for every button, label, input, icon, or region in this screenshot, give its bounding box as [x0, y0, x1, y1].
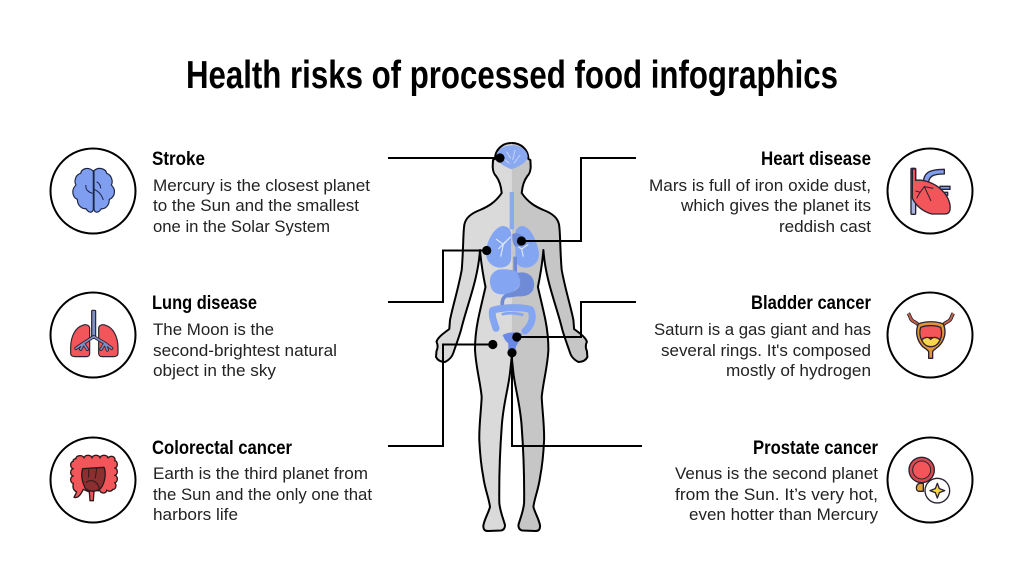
connector: bladder cancer	[512, 302, 636, 342]
heading: lung disease: Lung disease	[152, 292, 257, 314]
icon: brain	[50, 148, 136, 234]
intestines	[492, 308, 532, 331]
text: heart disease	[649, 177, 871, 236]
text: prostate cancer: Venus is the second planet	[675, 465, 878, 483]
text: heart disease: Mars is full of iron oxide dust,	[649, 177, 871, 195]
heading: prostate cancer: Prostate cancer	[753, 437, 878, 459]
text: lung disease: object in the sky	[153, 362, 277, 380]
heading: stroke: Stroke	[152, 148, 205, 170]
text: bladder cancer: several rings. It's composed	[661, 342, 871, 360]
duodenum	[502, 295, 512, 305]
text: colorectal cancer: harbors life	[153, 506, 238, 524]
connector: prostate cancer	[507, 348, 642, 446]
text: heart disease: which gives the planet its	[680, 197, 871, 215]
organs	[486, 145, 539, 351]
heading: colorectal cancer: Colorectal cancer	[152, 437, 292, 459]
icon: heart	[888, 148, 972, 234]
connector: colorectal cancer	[388, 340, 497, 446]
panel: bladder cancer	[654, 292, 972, 380]
panel: prostate cancer	[675, 437, 972, 524]
text: lung disease: second-brightest natural	[153, 342, 337, 360]
text: colorectal cancer: the Sun and the only one that	[153, 486, 372, 504]
icon: bladder	[888, 292, 972, 378]
body: right half	[512, 143, 587, 531]
text: lung disease: The Moon is the	[153, 321, 274, 339]
heart	[512, 233, 525, 247]
text: prostate cancer: even hotter than Mercury	[689, 506, 879, 524]
trachea	[510, 192, 514, 229]
icon: prostate	[888, 438, 972, 522]
liver	[490, 269, 522, 294]
heading: bladder cancer: Bladder cancer	[751, 292, 871, 314]
body figure	[436, 143, 587, 531]
text: stroke: one in the Solar System	[153, 218, 330, 236]
icon: lungs	[50, 292, 136, 378]
lungs	[486, 226, 511, 268]
text: stroke	[153, 177, 370, 236]
heading: heart disease: Heart disease	[761, 148, 871, 170]
text: colorectal cancer: Earth is the third planet from	[153, 465, 368, 483]
connector: lung disease	[388, 246, 491, 302]
body: left half	[436, 143, 512, 531]
text: heart disease: reddish cast	[779, 218, 871, 236]
small bowel	[502, 313, 523, 315]
text: stroke: Mercury is the closest planet	[153, 177, 370, 195]
panel: stroke	[50, 148, 370, 236]
text: lung disease	[153, 321, 337, 380]
text: bladder cancer: mostly of hydrogen	[726, 362, 871, 380]
panel: heart disease	[649, 148, 972, 236]
text: bladder cancer	[654, 321, 871, 380]
icon: intestine	[50, 438, 136, 522]
text: prostate cancer	[675, 465, 879, 524]
stomach	[505, 272, 534, 298]
panel: lung disease	[50, 292, 337, 380]
panel: colorectal cancer	[50, 437, 372, 524]
title: Health risks of processed food infographics	[186, 54, 838, 97]
text: stroke: to the Sun and the smallest	[153, 197, 359, 215]
connector: stroke	[388, 153, 505, 163]
text: bladder cancer: Saturn is a gas giant and has	[654, 321, 871, 339]
text: colorectal cancer	[153, 465, 372, 524]
text: prostate cancer: from the Sun. It’s very hot,	[675, 486, 878, 504]
brain	[496, 145, 528, 169]
esophagus	[513, 257, 517, 275]
rectum	[503, 332, 522, 351]
connector: heart disease	[517, 158, 636, 246]
